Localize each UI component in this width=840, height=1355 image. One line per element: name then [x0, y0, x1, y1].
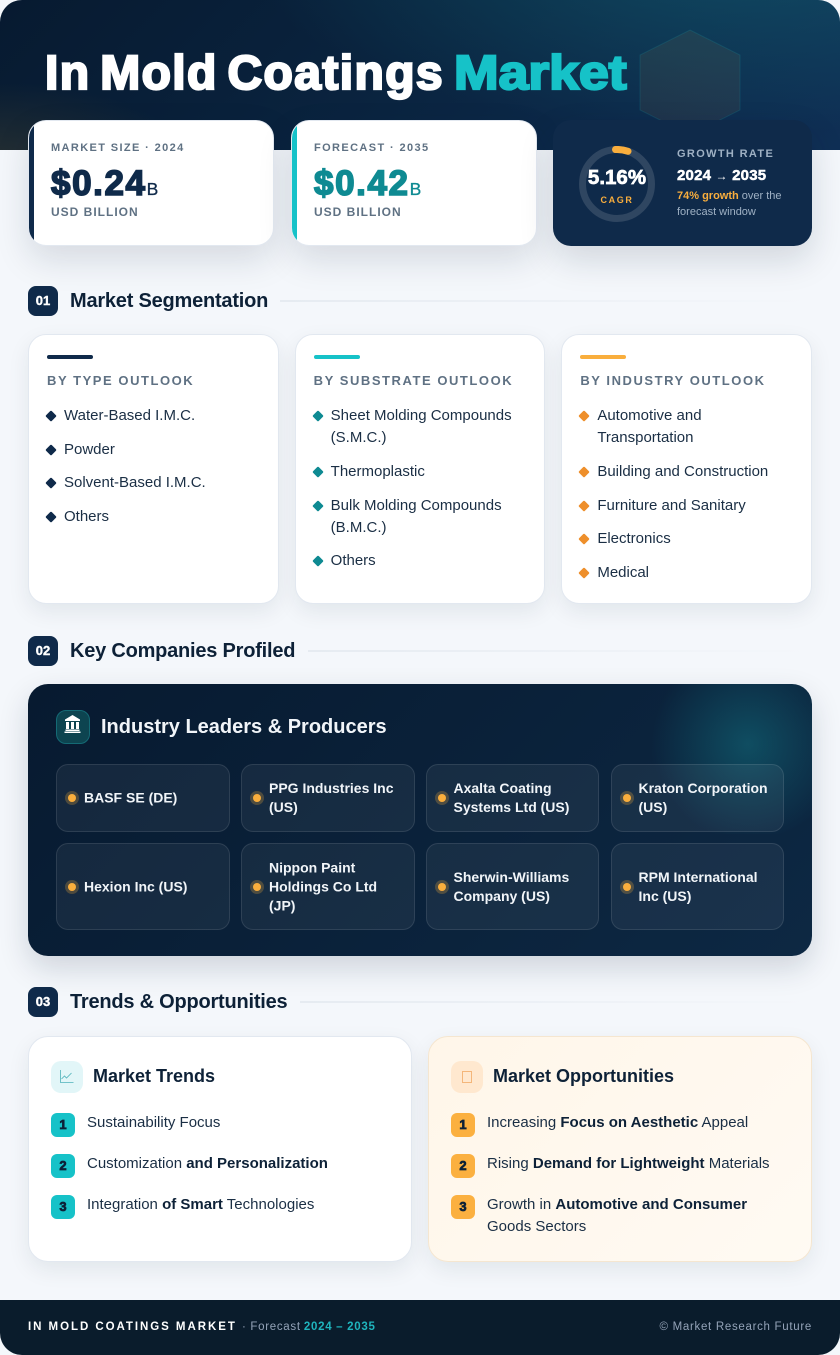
panel: market opportunities: Market Opportunities — [493, 1066, 674, 1086]
section heading 01: Market Segmentation — [70, 290, 268, 312]
growth label: GROWTH RATE — [677, 148, 774, 160]
panel: by type: Others — [64, 508, 109, 524]
panel: by industry: Automotive and — [597, 406, 702, 424]
panel: companies: (US) — [638, 799, 667, 815]
section heading 03: Trends & Opportunities — [70, 991, 287, 1013]
panel: companies: Kraton Corporation — [638, 780, 768, 796]
panel: by industry: Medical — [597, 564, 649, 580]
panel: market trends: Sustainability Focus — [87, 1114, 220, 1130]
panel: market trends: 3 — [59, 1199, 67, 1214]
panel: market trends: Market Trends — [93, 1066, 215, 1086]
panel: market trends: Customization and Personalization — [87, 1154, 328, 1172]
growth note: forecast window — [677, 206, 756, 218]
company cards — [56, 764, 230, 832]
panel: by substrate: (B.M.C.) — [331, 518, 386, 536]
footer title: IN MOLD COATINGS MARKET · Forecast 2024 – 2035 — [28, 1321, 376, 1333]
panel: companies: Holdings Co Ltd — [269, 878, 377, 894]
footer — [0, 1300, 840, 1355]
panel: by substrate: (S.M.C.) — [331, 428, 386, 446]
stat card: forecast: USD BILLION — [314, 205, 402, 219]
growth note — [677, 190, 782, 218]
section heading 02 — [28, 636, 520, 666]
panel: companies: (JP) — [269, 897, 295, 913]
panel: market trends — [28, 1036, 412, 1262]
panel title: Industry Leaders & Producers — [101, 716, 387, 738]
panel: by substrate: BY SUBSTRATE OUTLOOK — [314, 373, 513, 388]
panel: by substrate: Bulk Molding Compounds — [331, 496, 502, 514]
panel: companies: Company (US) — [454, 888, 550, 904]
footer credit: © Market Research Future — [660, 1321, 812, 1333]
panel: market trends: 1 — [59, 1117, 67, 1132]
panel: by industry — [561, 334, 812, 604]
company cards: BASF SE (DE) — [84, 790, 177, 806]
panel: by industry: Transportation — [597, 428, 694, 446]
icon: placeholder — [451, 1061, 483, 1093]
panel: companies: Sherwin-Williams — [454, 868, 569, 884]
stat card: market size — [28, 120, 274, 246]
stat card: forecast — [291, 120, 537, 246]
icon: bank — [56, 710, 90, 744]
panel: by type — [28, 334, 279, 604]
panel: companies: (US) — [269, 799, 298, 815]
panel: market opportunities: 2 — [459, 1158, 467, 1173]
panel: companies — [28, 684, 812, 956]
CAGR value: 5.16% — [588, 166, 646, 189]
panel: by type: Water-Based I.M.C. — [64, 406, 195, 424]
stat card: market size: USD BILLION — [51, 205, 139, 219]
panel: by type: Solvent-Based I.M.C. — [64, 474, 206, 490]
section heading 01 — [28, 286, 506, 316]
panel: market opportunities: Goods Sectors — [487, 1218, 586, 1234]
panel: by industry: BY INDUSTRY OUTLOOK — [580, 373, 766, 388]
panel: by type: BY TYPE OUTLOOK — [47, 373, 194, 388]
panel: market opportunities: Growth in Automotive and Consumer — [487, 1196, 747, 1212]
stat card: market size: MARKET SIZE · 2024 — [51, 142, 185, 154]
panel: market trends: Integration of Smart Technologies — [87, 1196, 314, 1212]
panel: by industry: Furniture and Sanitary — [597, 496, 746, 514]
panel: by substrate: Thermoplastic — [331, 462, 425, 480]
stat card: forecast: FORECAST · 2035 — [314, 142, 429, 154]
section heading 01: 01 — [36, 293, 50, 308]
title: In Mold Coatings — [45, 47, 444, 100]
panel: by industry: Electronics — [597, 530, 671, 546]
title — [45, 47, 628, 100]
CAGR ring — [579, 146, 655, 222]
panel: companies: Nippon Paint — [269, 859, 355, 875]
panel: by type: Powder — [64, 440, 115, 458]
panel: companies: Hexion Inc (US) — [84, 878, 187, 894]
section heading 02: 02 — [36, 643, 50, 658]
panel: market opportunities: 1 — [459, 1117, 467, 1132]
growth years: 2024 → 2035 — [677, 167, 766, 184]
panel: companies: Axalta Coating — [454, 780, 552, 796]
stat card: market size: $0.24B — [51, 164, 158, 203]
panel: market opportunities — [428, 1036, 812, 1262]
section heading 03 — [28, 987, 516, 1017]
stat card: growth rate — [553, 120, 812, 246]
decorative hexagon — [640, 30, 740, 120]
growth note: 74% growth over the — [677, 190, 782, 202]
CAGR label: CAGR — [601, 195, 633, 205]
panel: market opportunities: Increasing Focus on Aesthetic Appeal — [487, 1114, 748, 1130]
section heading 02: Key Companies Profiled — [70, 640, 295, 662]
panel: by substrate: Others — [331, 552, 376, 568]
panel: companies: RPM International — [638, 868, 758, 884]
panel: market trends: 2 — [59, 1158, 67, 1173]
panel: market opportunities: 3 — [459, 1199, 467, 1214]
stat card: forecast: $0.42B — [314, 164, 421, 203]
panel: by substrate — [295, 334, 545, 604]
panel: companies: Systems Ltd (US) — [454, 799, 569, 815]
panel: companies: PPG Industries Inc — [269, 780, 393, 796]
icon: chart — [51, 1061, 83, 1093]
panel: by industry: Building and Construction — [597, 462, 768, 480]
panel: market opportunities: Rising Demand for Lightweight Materials — [487, 1154, 770, 1172]
header banner — [0, 0, 840, 150]
panel: by substrate: Sheet Molding Compounds — [331, 406, 512, 424]
title: Market — [454, 47, 627, 100]
panel: companies: Inc (US) — [638, 888, 691, 904]
section heading 03: 03 — [36, 994, 50, 1009]
